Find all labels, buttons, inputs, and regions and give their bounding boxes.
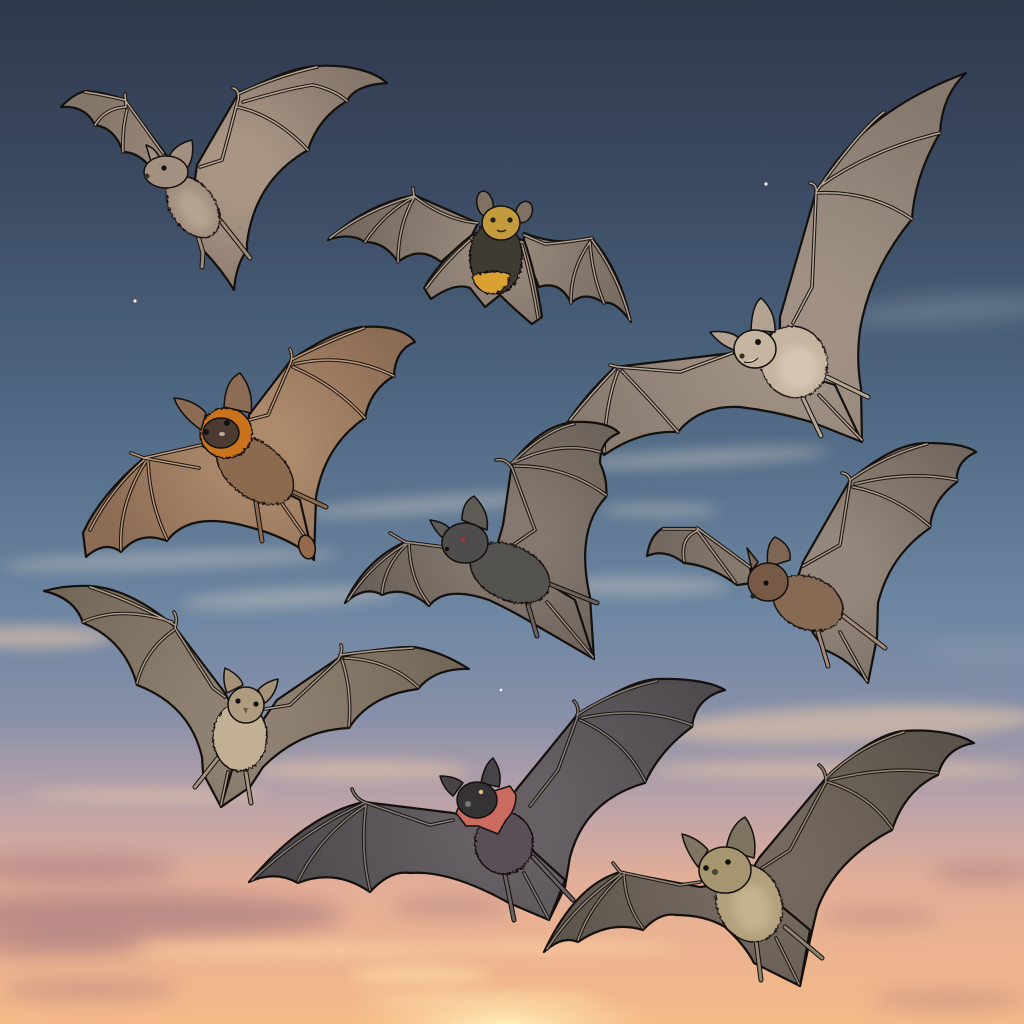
- bat 9: bottom right tan: [544, 730, 974, 986]
- legs: [803, 377, 868, 436]
- wings: [328, 195, 631, 324]
- tail tip: [296, 533, 318, 561]
- ears: [726, 817, 755, 858]
- wings: [345, 422, 619, 659]
- wings: [567, 73, 966, 455]
- legs: [197, 220, 250, 267]
- body: [204, 422, 306, 518]
- ears: [224, 668, 243, 693]
- wings: [44, 586, 469, 807]
- head: [442, 523, 488, 563]
- finger bones: [663, 444, 957, 681]
- bat 4: left orange collar: [83, 327, 415, 561]
- body: [461, 531, 559, 615]
- legs: [528, 583, 597, 636]
- wings: [83, 327, 415, 560]
- wings: [544, 730, 974, 986]
- finger bones: [570, 112, 940, 452]
- legs: [504, 857, 573, 920]
- bat 3: top right cream: [567, 73, 966, 455]
- head: [748, 563, 788, 601]
- clouds: [0, 288, 1024, 1024]
- bat 1: top left grey-brown: [61, 66, 387, 290]
- bat 6: right brown: [647, 443, 976, 683]
- wings: [647, 443, 976, 683]
- wings: [61, 66, 387, 290]
- finger bones: [547, 732, 938, 984]
- ears: [481, 758, 500, 787]
- head: [228, 687, 264, 723]
- head: [457, 782, 497, 818]
- ears: [462, 496, 487, 530]
- body: [213, 703, 267, 771]
- finger bones: [330, 188, 630, 320]
- finger bones: [252, 681, 692, 918]
- head: [144, 156, 188, 188]
- yellow belly: [472, 271, 510, 294]
- finger bones: [348, 424, 606, 657]
- finger bones: [85, 67, 347, 167]
- bat 8: bottom centre dark with red collar: [249, 679, 725, 920]
- body: [155, 167, 231, 247]
- bat 7: lower left tan: [44, 586, 469, 807]
- head: [482, 206, 520, 240]
- face: [203, 418, 239, 448]
- body: [765, 565, 851, 641]
- finger bones: [90, 328, 394, 550]
- body: [470, 220, 522, 294]
- legs: [756, 927, 822, 980]
- body: [751, 317, 837, 407]
- finger bones: [83, 587, 418, 805]
- head: [699, 847, 751, 893]
- bat 5: centre dark grey: [345, 422, 619, 659]
- wings: [249, 679, 725, 920]
- ears: [767, 537, 790, 567]
- legs: [195, 758, 251, 803]
- ears: [168, 140, 193, 170]
- bat 2: top centre yellow and black: [328, 188, 631, 324]
- red collar: [456, 786, 516, 834]
- stars: [133, 182, 768, 691]
- ears: [751, 298, 775, 332]
- body: [704, 854, 794, 952]
- legs: [256, 490, 326, 541]
- body: [475, 812, 533, 874]
- ears: [224, 373, 252, 413]
- ears: [474, 190, 496, 218]
- orange collar: [200, 408, 252, 458]
- legs: [818, 615, 885, 666]
- head: [734, 330, 776, 368]
